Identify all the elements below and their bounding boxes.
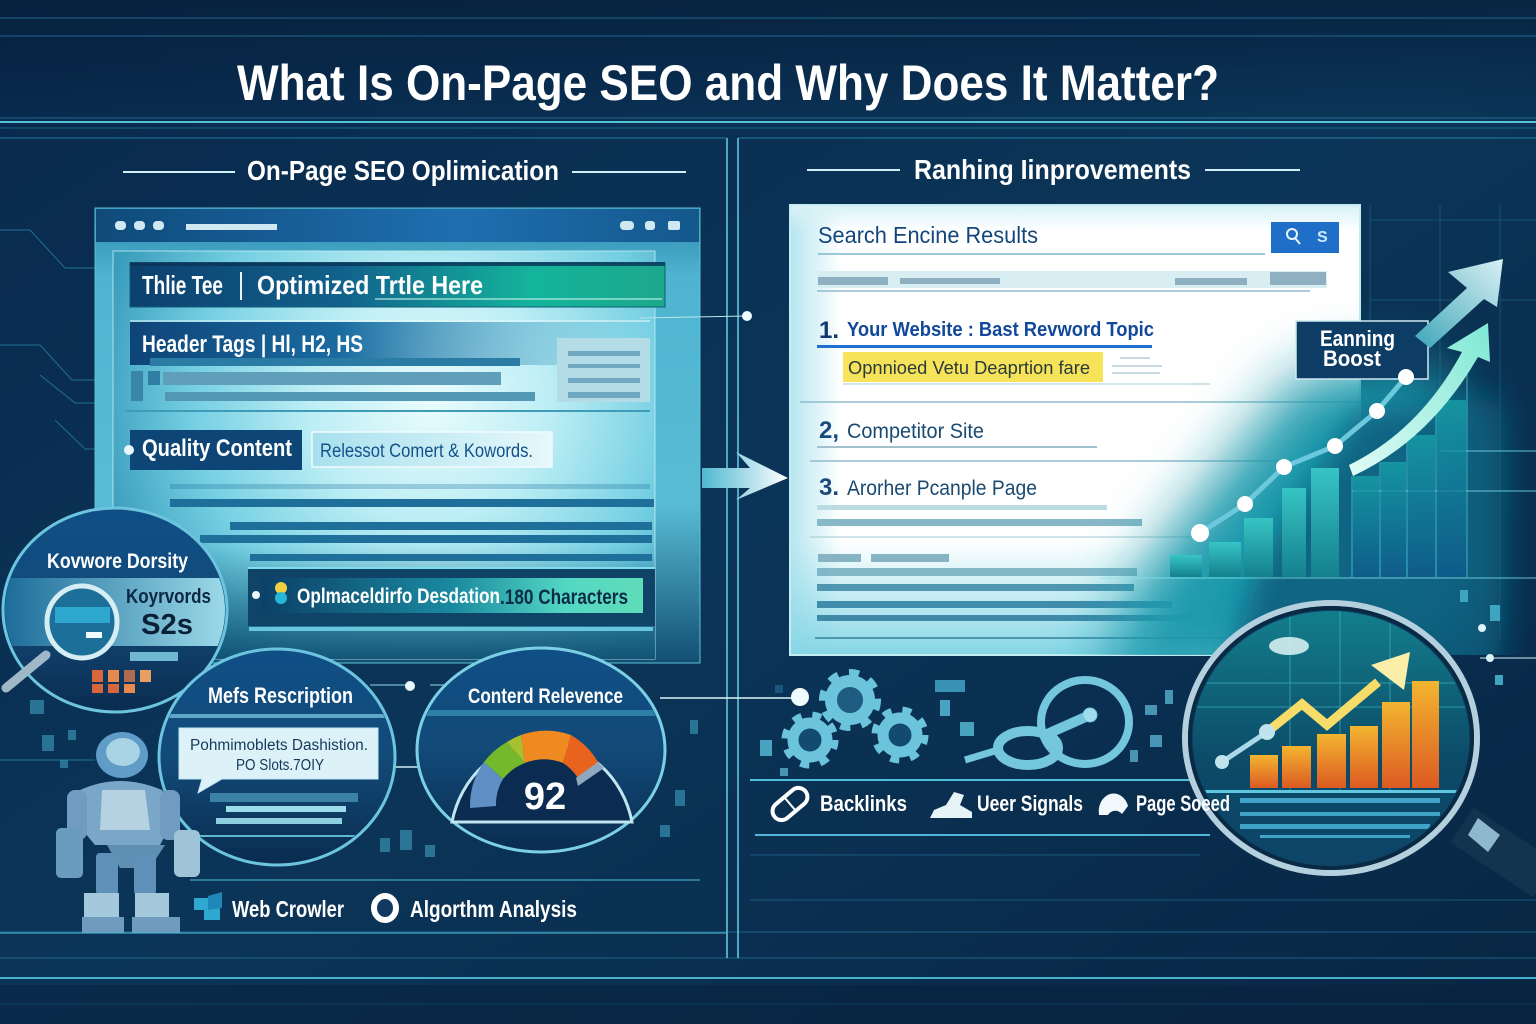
circle: meta description: Mefs Rescription xyxy=(208,683,353,708)
legend: user signals xyxy=(930,791,1083,818)
callout: description box: Pohmimoblets Dashistion. xyxy=(190,737,368,754)
legend: backlinks xyxy=(769,784,907,824)
circle: keyword density xyxy=(0,508,230,712)
result 1: your website xyxy=(800,317,1360,402)
result 3: another page: Arorher Pcanple Page xyxy=(847,477,1037,500)
row: optimized description xyxy=(248,568,655,631)
connector: content to gears xyxy=(660,697,800,699)
magnifying glass with chart xyxy=(1185,603,1536,880)
row: optimized description: Oplmaceldirfo Desdation xyxy=(297,585,500,608)
result 1: your website: Opnnioed Vetu Deaprtion fare xyxy=(848,357,1090,378)
search header xyxy=(818,222,1339,254)
legend: algorithm analysis: Algorthm Analysis xyxy=(410,896,577,922)
ranking boost label xyxy=(1296,321,1428,379)
ranking boost label: Eanning xyxy=(1320,326,1395,351)
body text lines xyxy=(170,484,654,561)
icons: gears xyxy=(760,673,1173,776)
ranking boost label: Boost xyxy=(1323,346,1382,371)
row: title tag: Thlie Tee xyxy=(142,270,223,300)
circle: content relevance xyxy=(417,648,665,852)
legend: user signals: Ueer Signals xyxy=(977,791,1083,816)
placeholder bars xyxy=(817,271,1327,291)
result text lines xyxy=(810,537,1230,639)
search results page xyxy=(790,205,1360,655)
line with markers xyxy=(1191,369,1414,542)
row: header tags xyxy=(125,321,650,411)
row: optimized description: .180 Characters xyxy=(500,586,628,609)
icon: search button: S xyxy=(1317,229,1328,246)
row: quality content xyxy=(124,430,552,470)
legend: backlinks: Backlinks xyxy=(820,791,907,816)
search header: Search Encine Results xyxy=(818,222,1038,248)
teal chart backdrop xyxy=(1090,360,1500,700)
line and dot: meta to content xyxy=(370,681,470,772)
arrow: upper xyxy=(1415,259,1503,348)
lens trend arrow xyxy=(1215,652,1410,769)
result 2: competitor: Competitor Site xyxy=(847,420,984,443)
callout: description box: PO Slots.7OIY xyxy=(236,757,324,774)
circle: keyword density: S2s xyxy=(141,609,193,641)
result 1: your website: 1. xyxy=(819,317,839,344)
gauge: 92 xyxy=(524,776,566,818)
browser window xyxy=(95,208,700,663)
row: header tags: Header Tags | Hl, H2, HS xyxy=(142,331,363,358)
legend: page speed: Page Soeed xyxy=(1136,791,1230,816)
icon: chain link xyxy=(965,680,1129,765)
circle: meta description xyxy=(159,649,400,865)
magnifier handle xyxy=(1462,818,1536,880)
result 2: competitor: 2, xyxy=(819,417,839,444)
result 3: another page: 3. xyxy=(819,474,839,501)
panel: on-page SEO optimization xyxy=(0,155,727,933)
callout: description box xyxy=(179,728,378,793)
legend: web crawler: Web Crowler xyxy=(232,896,344,922)
row: quality content: Relessot Comert & Kowords. xyxy=(320,441,533,462)
circle: keyword density: Koyrvords xyxy=(126,586,211,608)
result 1: your website: Your Website : Bast Revword Topic xyxy=(847,318,1154,341)
result 3: another page xyxy=(817,474,1142,526)
rising bar chart xyxy=(1170,400,1466,577)
row: title tag: Optimized Trtle Here xyxy=(257,270,483,300)
connector: title tag to results xyxy=(640,311,752,321)
gauge xyxy=(452,731,632,822)
heading: on-page SEO: On-Page SEO Oplimication xyxy=(247,155,559,186)
decorative dots xyxy=(1460,590,1536,685)
arrow: left to right xyxy=(702,452,788,500)
legend: web crawler xyxy=(194,892,344,922)
heading: ranking improvements: Ranhing Iinprovements xyxy=(914,154,1191,185)
title: What Is On-Page SEO and Why Does It Matter? xyxy=(237,55,1219,111)
robot crawler xyxy=(56,732,200,933)
circle: content relevance: Conterd Relevence xyxy=(468,685,623,708)
arrow: curved xyxy=(1349,323,1490,476)
panel: ranking improvements xyxy=(750,154,1536,880)
legend: page speed xyxy=(1099,791,1230,816)
row: quality content: Quality Content xyxy=(142,435,292,462)
chart grid xyxy=(1100,360,1536,578)
icon: search button xyxy=(1271,222,1339,253)
icon: magnifier xyxy=(6,586,117,688)
decorative data pixels xyxy=(30,700,698,857)
circle: keyword density: Kovwore Dorsity xyxy=(47,550,188,573)
result 2: competitor xyxy=(810,417,1345,461)
lens bar chart xyxy=(1250,681,1439,788)
row: title tag xyxy=(130,262,665,307)
